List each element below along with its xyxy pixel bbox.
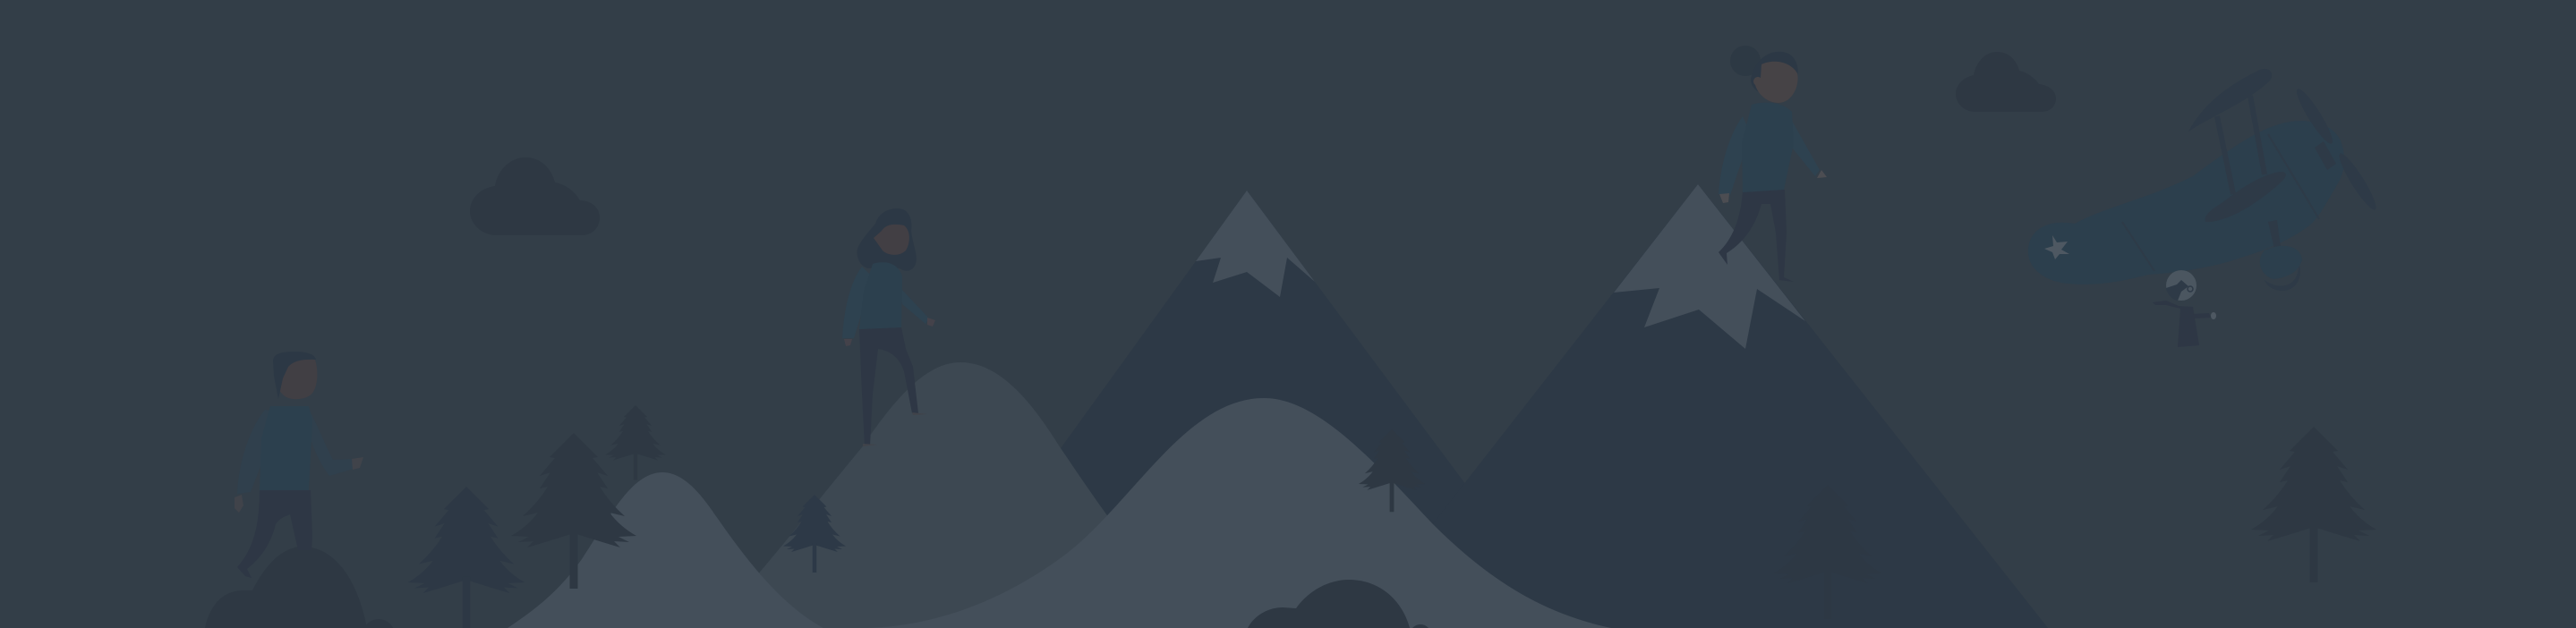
arms — [842, 267, 929, 338]
mountain: right snowy peak — [1352, 184, 2048, 628]
sweater — [1742, 103, 1794, 192]
person: woman on right peak — [1719, 46, 1827, 282]
tree: small behind left hill — [605, 405, 666, 480]
trousers — [859, 327, 918, 446]
trousers — [237, 490, 312, 578]
feet — [863, 412, 927, 446]
pilot head — [2166, 270, 2196, 301]
bush: bottom left — [205, 547, 395, 628]
hair — [1751, 52, 1798, 102]
head — [275, 360, 317, 399]
cloud: right — [1956, 52, 2056, 112]
hands — [235, 457, 363, 513]
biplane — [2028, 69, 2381, 347]
pilot scarf and body — [2153, 301, 2199, 347]
wing struts — [2217, 96, 2265, 194]
face — [874, 225, 909, 255]
tree: far right — [2251, 427, 2376, 582]
hair — [857, 208, 917, 271]
cloud: left — [470, 157, 600, 235]
hair bun — [1730, 46, 1761, 76]
bush: bottom centre — [1248, 580, 1431, 628]
sweater — [260, 406, 312, 490]
landing gear — [2260, 220, 2302, 291]
pilot — [2153, 270, 2216, 347]
pilot goggles and mask — [2166, 280, 2188, 301]
pilot hand — [2211, 312, 2216, 319]
pilot arm — [2193, 313, 2211, 318]
trousers — [1719, 190, 1794, 282]
cowl and tail seams — [2122, 134, 2319, 271]
person: woman on middle hill — [842, 208, 935, 446]
tail star — [2044, 235, 2069, 259]
lower wing — [2205, 172, 2286, 222]
hill: front centre — [859, 398, 1611, 628]
hands — [844, 318, 935, 346]
face and ear — [1753, 62, 1798, 103]
tree: on centre hill — [1359, 429, 1425, 512]
tree: far left — [408, 487, 525, 628]
tree: large left — [511, 433, 636, 589]
fuselage — [2028, 121, 2344, 284]
upper wing — [2188, 69, 2272, 132]
tree: faint on right mountain — [1774, 485, 1881, 619]
hair — [273, 352, 316, 399]
mountain: back snowy peak — [931, 191, 1573, 628]
propeller — [2292, 86, 2381, 213]
person: left man — [235, 352, 363, 578]
hill: middle — [698, 362, 1208, 628]
arms — [1719, 116, 1820, 195]
hands — [1719, 170, 1827, 203]
arms — [237, 410, 354, 494]
hill: front left — [508, 472, 823, 628]
tree: on middle hill — [783, 495, 846, 573]
sweater — [859, 262, 902, 329]
